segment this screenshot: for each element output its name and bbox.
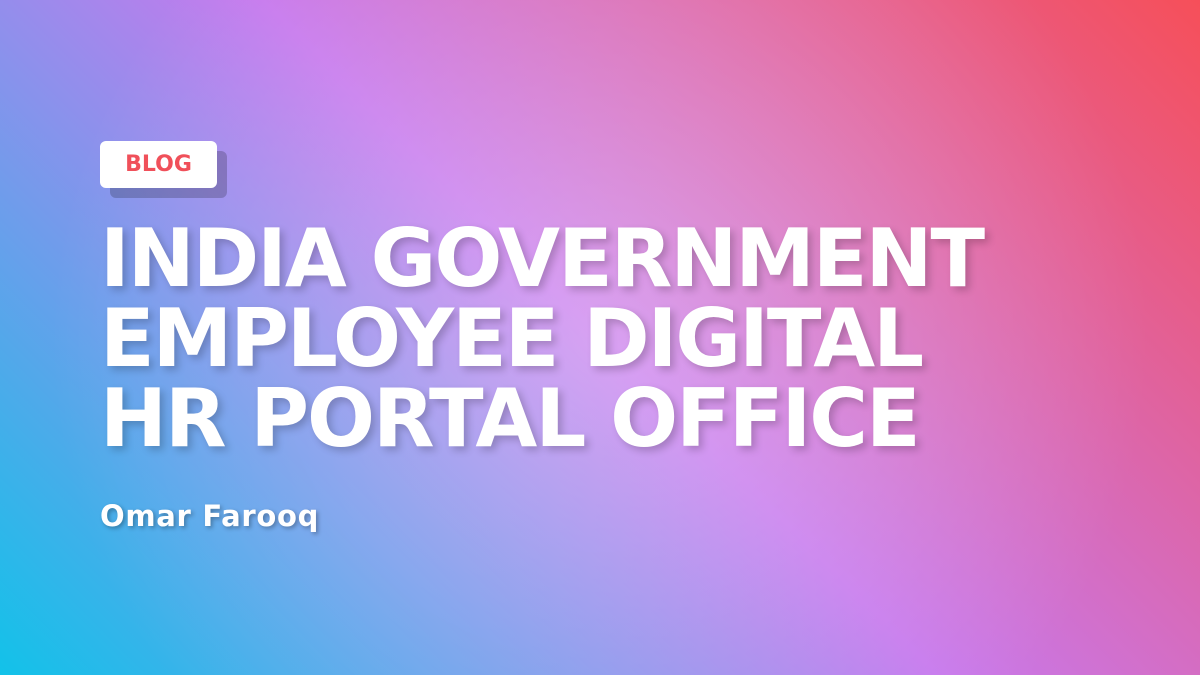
badge: blog: BLOG	[125, 152, 192, 177]
author name: Omar Farooq	[100, 499, 319, 533]
title: HR PORTAL OFFICE	[100, 372, 919, 465]
title: INDIA GOVERNMENT	[100, 212, 983, 305]
badge: blog	[100, 141, 217, 188]
title: EMPLOYEE DIGITAL	[100, 292, 922, 385]
title	[100, 212, 992, 465]
